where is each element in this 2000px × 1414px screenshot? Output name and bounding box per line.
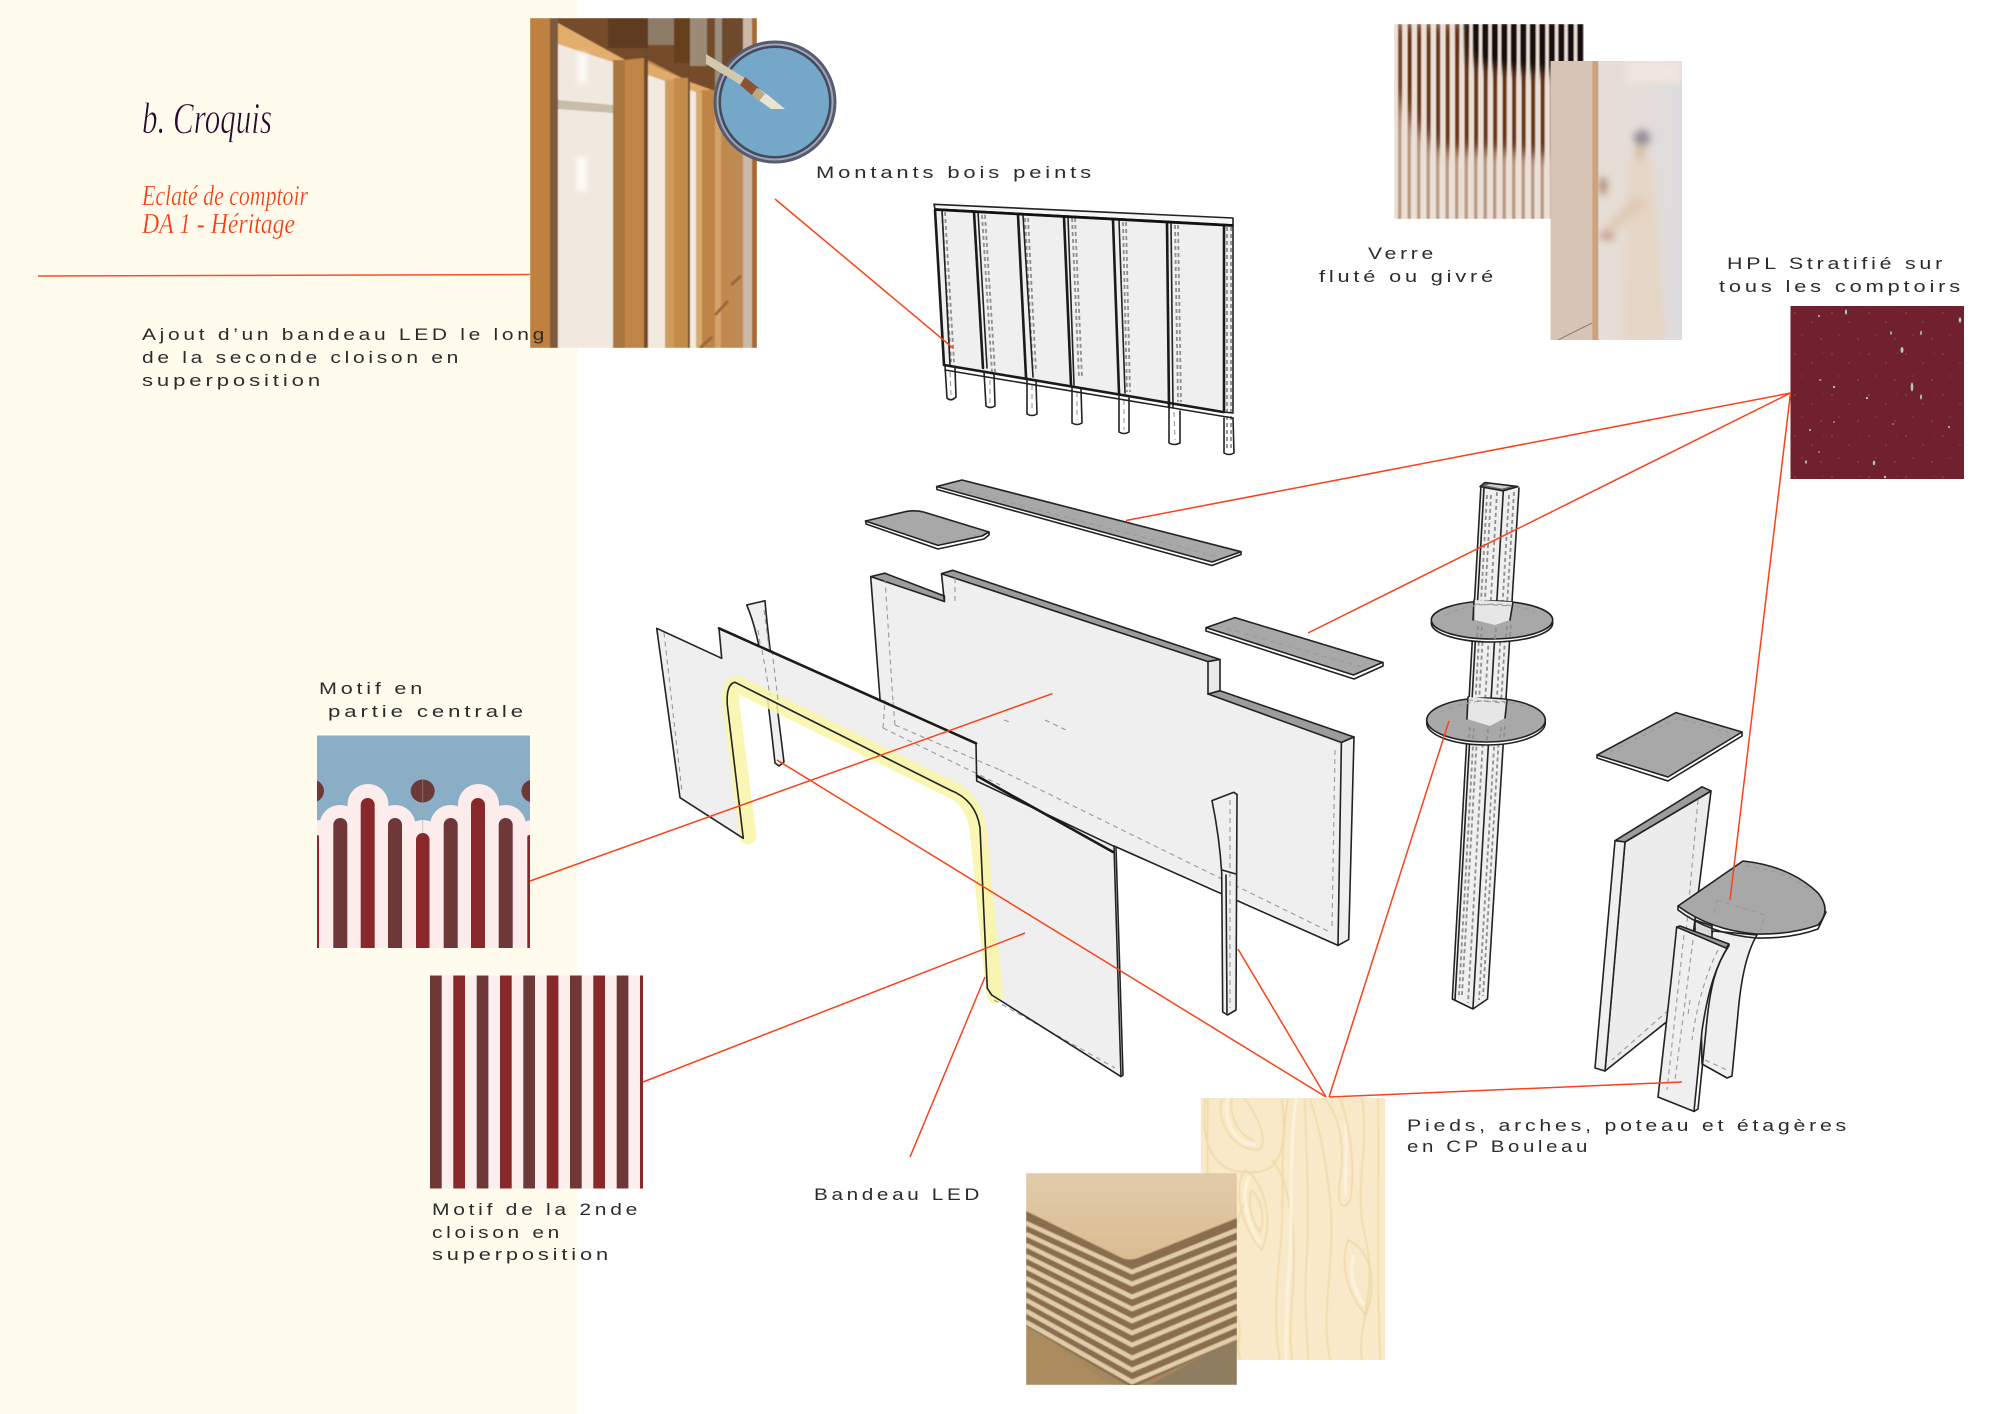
- label: verre: [1319, 244, 1497, 286]
- drawing: arch foot behind: [747, 601, 784, 766]
- title: b. Croquis: [142, 94, 272, 143]
- drawing: half-round table top: [1678, 861, 1826, 940]
- image: central motif swatch: [317, 736, 530, 948]
- image: plywood stack: [1026, 1173, 1237, 1388]
- drawing: foot right: [1212, 792, 1237, 1015]
- text block: LED note: Ajout d’un bandeau LED le long: [142, 325, 548, 344]
- drawing: front leg: [1658, 926, 1729, 1111]
- frame post dashes: [942, 212, 1231, 450]
- label: second partition motif: [432, 1200, 641, 1264]
- image: wood frame photo: [530, 18, 757, 348]
- label: birch plywood: [1407, 1116, 1850, 1156]
- bottom rail: [944, 365, 1223, 412]
- drawing: front arch panel: [657, 628, 1123, 1077]
- image: fluted glass: [1394, 24, 1584, 219]
- subtitle: [141, 180, 309, 240]
- image: frosted glass: [1550, 61, 1682, 340]
- label: HPL: [1719, 254, 1964, 296]
- drawing: rear partition: [871, 570, 1354, 945]
- third glass pane: [690, 82, 712, 92]
- text block: LED note: superposition: [142, 371, 324, 390]
- panel: cream side band: [0, 0, 578, 1414]
- drawing: column with discs: [1427, 482, 1553, 1009]
- icon: paint can with brush: [706, 40, 836, 164]
- LED highlight: [731, 684, 995, 995]
- label: central motif: partie centrale: [328, 702, 527, 721]
- drawing: painted wood frame: [934, 204, 1234, 454]
- divider line under subtitle: [38, 274, 530, 276]
- subtitle: Eclaté de comptoir: [141, 180, 309, 212]
- drawing: top plate right: [1597, 713, 1742, 781]
- label: second partition motif: Motif de la 2nde: [432, 1200, 641, 1219]
- drawing: top board short: [865, 511, 989, 549]
- upper dark mesh band: [558, 18, 716, 90]
- label: birch plywood: en CP Bouleau: [1407, 1137, 1591, 1156]
- drawing: top board right: [1206, 618, 1383, 679]
- leader lines: [530, 199, 1790, 1157]
- second glass pane: [648, 63, 680, 81]
- top rail: [934, 204, 1233, 225]
- image: second partition stripes swatch: [430, 976, 643, 1188]
- subtitle: DA 1 - Héritage: [141, 208, 295, 240]
- label: montants: Montants bois peints: [816, 163, 1095, 182]
- frame posts: [935, 210, 1234, 454]
- text block: LED note: de la seconde cloison en: [142, 348, 462, 367]
- label: LED strip: Bandeau LED: [814, 1185, 983, 1204]
- lower disc: [1427, 697, 1545, 745]
- label: HPL: tous les comptoirs: [1719, 277, 1964, 296]
- label: second partition motif: cloison en: [432, 1223, 563, 1242]
- text block: LED note: [142, 325, 548, 390]
- upper disc: [1431, 600, 1553, 642]
- first glass pane: [558, 23, 625, 62]
- drawing: rear leg: [1700, 931, 1757, 1078]
- drawing: side panel right: [1595, 787, 1711, 1071]
- label: central motif: Motif en: [319, 679, 426, 698]
- image: birch veneer: [1201, 1098, 1385, 1360]
- label: HPL: HPL Stratifié sur: [1727, 254, 1946, 273]
- label: central motif: [319, 679, 527, 721]
- image: HPL laminate swatch: [1790, 306, 1964, 479]
- label: birch plywood: Pieds, arches, poteau et étagères: [1407, 1116, 1850, 1135]
- label: second partition motif: superposition: [432, 1245, 612, 1264]
- label: verre: fluté ou givré: [1319, 267, 1497, 286]
- drawing: top board long: [937, 480, 1241, 566]
- label: verre: Verre: [1368, 244, 1437, 263]
